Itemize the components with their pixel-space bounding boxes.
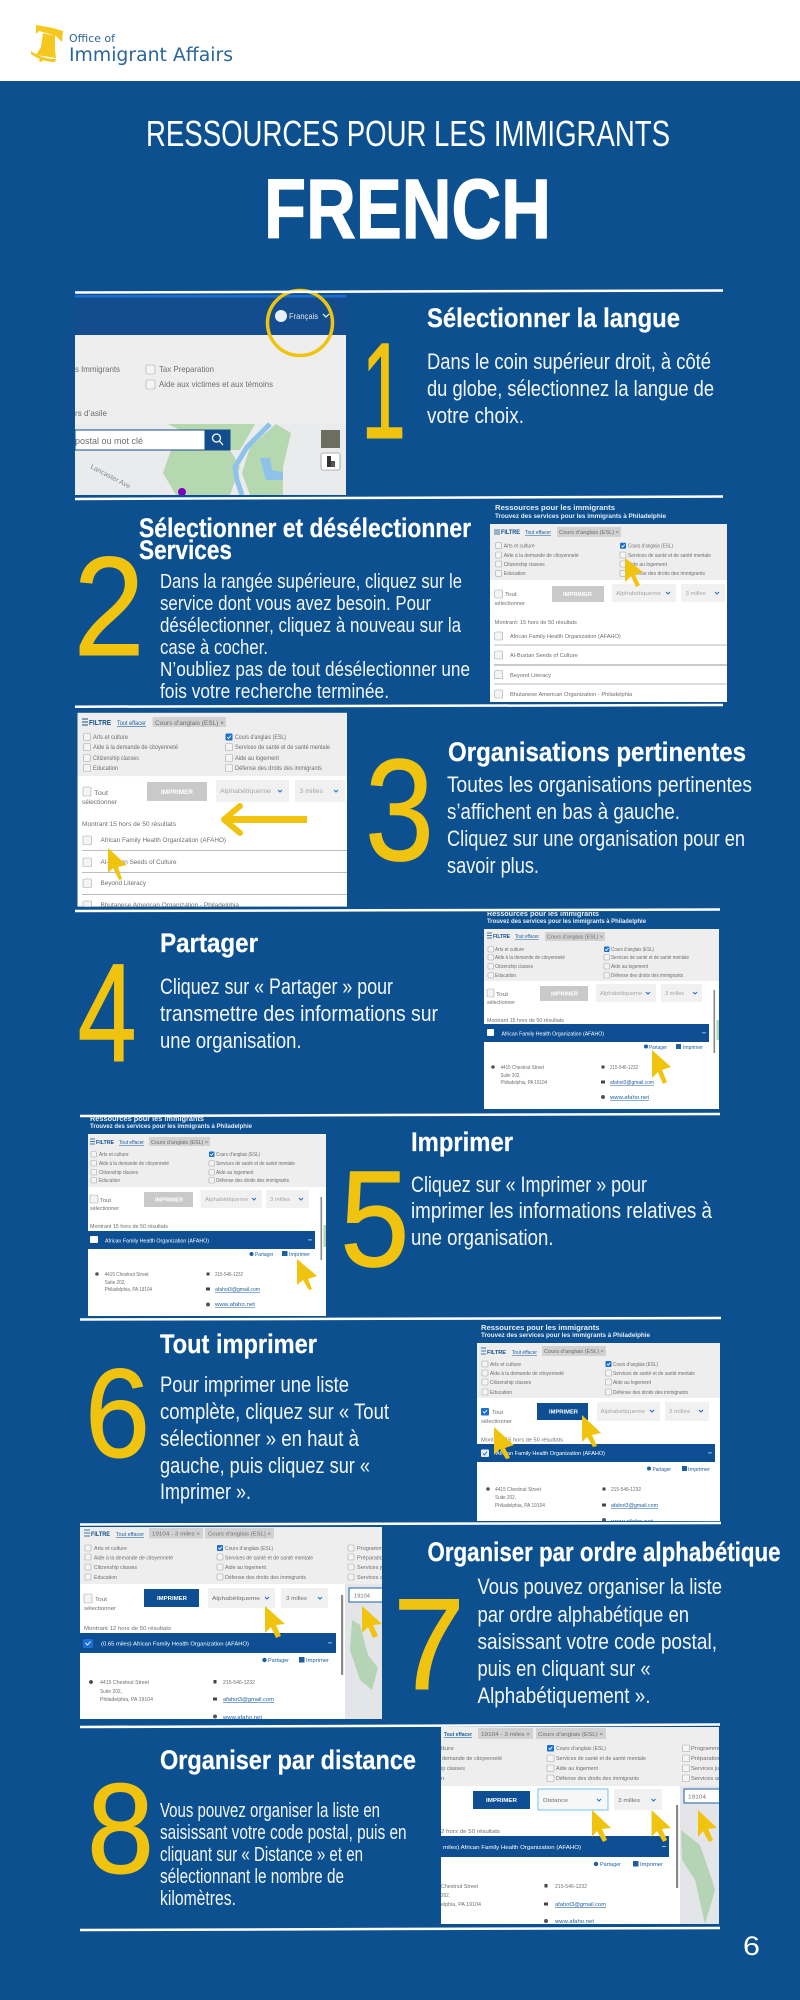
screenshot: service filters: Cours d’anglais (ESL) × bbox=[559, 530, 619, 536]
text block: fois votre recherche terminée. bbox=[160, 681, 389, 703]
screenshot: print link: Défense des droits des immigrants bbox=[216, 1178, 289, 1184]
text block: Pour imprimer une liste bbox=[160, 1372, 349, 1397]
screenshot: results list: Montrant 15 hors de 50 résultats bbox=[82, 822, 176, 828]
icon: liberty bell bbox=[31, 25, 63, 62]
screenshot: print link: Trouvez des services pour les immigrants à Philadelphie bbox=[90, 1124, 253, 1130]
screenshot: distance sort bbox=[441, 1727, 740, 1925]
screenshot: language selector: Français bbox=[289, 311, 318, 321]
heading bbox=[139, 513, 471, 565]
text block: Cliquez sur « Partager » pour bbox=[160, 974, 393, 999]
screenshot: alphabetical sort: Montrant 12 hors de 50 résultats bbox=[84, 1626, 171, 1632]
number 7: 7 bbox=[393, 1571, 465, 1717]
screenshot: alphabetical sort: Imprimer bbox=[306, 1658, 329, 1664]
text block: sélectionnant le nombre de bbox=[160, 1866, 344, 1888]
screenshot: alphabetical sort: Aide au logement bbox=[225, 1565, 266, 1571]
screenshot: print link: afahot3@gmail.com bbox=[215, 1287, 260, 1293]
screenshot: distance sort: Services aux bbox=[691, 1776, 724, 1782]
screenshot: alphabetical sort: Cours d’anglais (ESL) bbox=[225, 1546, 273, 1552]
header band bbox=[0, 0, 800, 81]
screenshot: language selector: Aide aux victimes et aux témoins bbox=[159, 379, 273, 389]
screenshot: print link: Ressources pour les immigrants bbox=[90, 1114, 204, 1123]
text block: Imprimer ». bbox=[160, 1479, 251, 1504]
icon: yellow cursor bbox=[297, 1259, 317, 1290]
text block: Toutes les organisations pertinentes bbox=[447, 772, 752, 797]
text block: cliquant sur « Distance » et en bbox=[160, 1844, 363, 1866]
text block: s’affichent en bas à gauche. bbox=[447, 799, 680, 824]
screenshot: select all and print: African Family Health Organization (AFAHO) bbox=[496, 1451, 605, 1457]
screenshot: service filters: Tout effacer bbox=[525, 530, 551, 536]
screenshot: alphabetical sort: Défense des droits des immigrants bbox=[225, 1575, 306, 1581]
screenshot: share link: sélectionner bbox=[487, 1000, 515, 1006]
heading: Imprimer bbox=[411, 1127, 513, 1157]
screenshot: service filters: Al-Bustan Seeds of Culture bbox=[510, 653, 578, 659]
arrow: points to results bbox=[224, 806, 307, 833]
screenshot: alphabetical sort: Services juridiques bbox=[357, 1565, 404, 1571]
screenshot: print link: Aide à la demande de citoyenneté bbox=[99, 1161, 169, 1167]
screenshot: select all and print: Imprimer bbox=[688, 1467, 710, 1473]
text block: service dont vous avez besoin. Pour bbox=[160, 593, 431, 615]
screenshot: service filters: Ressources pour les immigrants bbox=[495, 503, 615, 512]
screenshot: results list: sélectionner bbox=[82, 800, 117, 806]
icon: yellow cursor, print bbox=[582, 1415, 601, 1447]
screenshot: print link: FILTRE bbox=[96, 1140, 114, 1146]
text block: imprimer les informations relatives à bbox=[411, 1198, 713, 1223]
text block: kilomètres. bbox=[160, 1888, 236, 1910]
screenshot: service filters: IMPRIMER bbox=[563, 592, 592, 598]
screenshot: language selector: Tax Preparation bbox=[159, 364, 214, 374]
screenshot: results list: Cours d’anglais (ESL) bbox=[235, 735, 286, 741]
screenshot: share link: Arts et culture bbox=[495, 947, 524, 953]
screenshot: share link: Défense des droits des immigrants bbox=[611, 973, 683, 979]
panel: step 6 bbox=[85, 1323, 720, 1525]
screenshot: select all and print: Arts et culture bbox=[490, 1362, 521, 1368]
panel: step 8 bbox=[87, 1727, 740, 1925]
screenshot: distance sort: 202, bbox=[441, 1893, 450, 1899]
screenshot: share link: FILTRE bbox=[493, 934, 510, 940]
screenshot: service filters: Cours d’anglais (ESL) bbox=[628, 544, 673, 550]
screenshot: distance sort: 215-546-1232 bbox=[555, 1884, 587, 1890]
screenshot: distance sort: Chestnut Street bbox=[441, 1884, 478, 1890]
screenshot: results list: Tout bbox=[94, 791, 108, 797]
screenshot: alphabetical sort: Arts et culture bbox=[94, 1546, 127, 1552]
screenshot: print link: Cours d’anglais (ESL) bbox=[216, 1152, 260, 1158]
screenshot: select all and print: Aide à la demande de citoyenneté bbox=[490, 1371, 564, 1377]
screenshot: alphabetical sort bbox=[80, 1527, 404, 1721]
screenshot: print link: Services de santé et de santé mentale bbox=[216, 1161, 295, 1167]
screenshot: distance sort: Programmes bbox=[691, 1746, 724, 1752]
screenshot: share link: Citizenship classes bbox=[495, 964, 533, 970]
panel: step 7 bbox=[80, 1527, 780, 1721]
screenshot: share link: Services de santé et de santé mentale bbox=[611, 955, 689, 961]
screenshot: print link: Philadelphia, PA 19104 bbox=[105, 1287, 152, 1293]
text block bbox=[160, 974, 438, 1053]
screenshot: select all and print: 4415 Chestnut Street bbox=[495, 1487, 542, 1493]
screenshot: select all and print: Education bbox=[490, 1390, 512, 1396]
screenshot: results list: Services de santé et de santé mentale bbox=[235, 745, 331, 751]
screenshot: alphabetical sort: sélectionner bbox=[84, 1606, 116, 1612]
screenshot: distance sort: Cours d’anglais (ESL) × bbox=[538, 1732, 603, 1738]
page number: 6 bbox=[743, 1931, 760, 1961]
screenshot: print link: Education bbox=[99, 1178, 120, 1184]
text block bbox=[478, 1574, 722, 1708]
screenshot: distance sort: Partager bbox=[600, 1862, 621, 1868]
icon: yellow cursor, select all bbox=[494, 1427, 514, 1459]
screenshot: results list: Aide à la demande de citoyenneté bbox=[93, 745, 179, 751]
number 3: 3 bbox=[365, 729, 434, 891]
screenshot: share link: Ressources pour les immigrants bbox=[487, 909, 599, 918]
panel: step 4 bbox=[78, 909, 719, 1109]
icon: yellow cursor, miles menu bbox=[652, 1810, 671, 1842]
title bbox=[146, 113, 670, 256]
screenshot: distance sort: afahot3@gmail.com bbox=[555, 1902, 606, 1908]
screenshot: select all and print: afahot3@gmail.com bbox=[611, 1503, 658, 1509]
language heading: FRENCH bbox=[264, 162, 551, 256]
screenshot: distance sort: Tout effacer bbox=[444, 1732, 473, 1738]
screenshot: language selector: s Immigrants bbox=[75, 364, 120, 374]
heading: Sélectionner la langue bbox=[427, 303, 680, 333]
text block: une organisation. bbox=[411, 1225, 554, 1250]
screenshot: alphabetical sort: Aide à la demande de citoyenneté bbox=[94, 1556, 173, 1562]
text block: Vous pouvez organiser la liste en bbox=[160, 1800, 380, 1822]
screenshot: print link: Cours d’anglais (ESL) × bbox=[151, 1140, 208, 1146]
panel: step 3 bbox=[78, 713, 752, 910]
screenshot: service filters: Beyond Literacy bbox=[510, 673, 551, 679]
text block: Cliquez sur une organisation pour en bbox=[447, 826, 745, 851]
screenshot: results list: Education bbox=[93, 766, 118, 772]
screenshot: select all and print: Tout effacer bbox=[512, 1350, 537, 1356]
icon: yellow cursor bbox=[652, 1050, 671, 1084]
number 1: 1 bbox=[361, 315, 406, 468]
screenshot: distance sort: 19104 bbox=[688, 1794, 707, 1800]
screenshot: share link: Tout effacer bbox=[515, 934, 539, 940]
text block: par ordre alphabétique en bbox=[478, 1602, 689, 1627]
screenshot: share link: Partager bbox=[649, 1045, 667, 1051]
screenshot: results list: Tout effacer bbox=[117, 721, 146, 727]
screenshot: alphabetical sort: FILTRE bbox=[91, 1532, 110, 1538]
logo wordmark: Office of bbox=[69, 32, 116, 45]
screenshot: print link: 215-546-1232 bbox=[215, 1272, 243, 1278]
screenshot: share link: Cours d’anglais (ESL) × bbox=[547, 934, 603, 940]
screenshot: results list: 3 milles bbox=[300, 789, 323, 795]
screenshot: print link: www.afaho.net bbox=[215, 1302, 256, 1308]
screenshot: select all and print: Services de santé et de santé mentale bbox=[613, 1371, 695, 1377]
text block bbox=[427, 349, 714, 428]
screenshot: results list bbox=[78, 713, 347, 910]
screenshot: select all and print: Alphabétiqueme bbox=[600, 1409, 645, 1415]
screenshot: service filters: Montrant: 15 hors de 50 résultats bbox=[495, 620, 577, 626]
screenshot: share link: Alphabétiqueme bbox=[600, 991, 642, 997]
screenshot: print link bbox=[88, 1114, 326, 1316]
screenshot: select all and print bbox=[477, 1323, 720, 1525]
screenshot: service filters: Aide à la demande de citoyenneté bbox=[504, 553, 579, 559]
screenshot: alphabetical sort: Services de santé et de santé mentale bbox=[225, 1556, 313, 1562]
screenshot: share link: Imprimer bbox=[683, 1045, 703, 1051]
text block: complète, cliquez sur « Tout bbox=[160, 1399, 389, 1424]
screenshot: distance sort: 19104 - 3 miles × bbox=[481, 1732, 530, 1738]
text block bbox=[160, 571, 470, 703]
screenshot: results list: Citizenship classes bbox=[93, 756, 139, 762]
text block: saisissant votre code postal, bbox=[478, 1629, 717, 1654]
screenshot: service filters: Education bbox=[504, 571, 526, 577]
text block bbox=[411, 1172, 713, 1250]
screenshot: alphabetical sort: IMPRIMER bbox=[157, 1596, 187, 1602]
screenshot: alphabetical sort: Tout effacer bbox=[116, 1532, 144, 1538]
screenshot: print link: Alphabétiqueme bbox=[205, 1197, 248, 1203]
screenshot: share link: Suite 202, bbox=[500, 1073, 520, 1079]
screenshot: distance sort: demande de citoyenneté bbox=[442, 1756, 502, 1762]
screenshot: share link: IMPRIMER bbox=[551, 992, 578, 998]
screenshot: alphabetical sort: Suite 202, bbox=[100, 1689, 122, 1695]
screenshot: distance sort: Distance bbox=[543, 1798, 568, 1804]
screenshot: select all and print: FILTRE bbox=[487, 1350, 506, 1356]
screenshot: distance sort: www.afaho.net bbox=[554, 1919, 594, 1925]
screenshot: select all and print: Défense des droits des immigrants bbox=[613, 1390, 688, 1396]
screenshot: select all and print: Tout bbox=[492, 1410, 504, 1416]
screenshot: print link: IMPRIMER bbox=[155, 1198, 183, 1204]
text block bbox=[447, 772, 752, 878]
screenshot: results list: Beyond Literacy bbox=[100, 881, 146, 887]
screenshot: service filters: Trouvez des services pour les immigrants à Philadelphie bbox=[495, 513, 667, 520]
screenshot: select all and print: www.afaho.net bbox=[611, 1519, 654, 1525]
text block: Cliquez sur « Imprimer » pour bbox=[411, 1172, 647, 1197]
screenshot: print link: Tout effacer bbox=[119, 1140, 144, 1146]
screenshot: service filters bbox=[490, 503, 727, 702]
screenshot: print link: Montrant 15 hors de 50 résultats bbox=[90, 1224, 169, 1230]
screenshot: alphabetical sort: Programmes bbox=[357, 1546, 389, 1552]
screenshot: distance sort: lture bbox=[441, 1746, 454, 1752]
screenshot: service filters: Bhutanese American Organization - Philadelphia bbox=[510, 692, 632, 698]
screenshot: results list: FILTRE bbox=[89, 720, 111, 727]
screenshot: service filters: Arts et culture bbox=[504, 544, 535, 550]
screenshot: select all and print: Ressources pour les immigrants bbox=[481, 1323, 600, 1332]
screenshot: distance sort: elphia, PA 19104 bbox=[441, 1902, 482, 1908]
screenshot: results list: IMPRIMER bbox=[161, 790, 194, 796]
logo wordmark bbox=[69, 32, 233, 66]
text block: gauche, puis cliquez sur « bbox=[160, 1453, 370, 1478]
screenshot: print link: Citizenship classes bbox=[99, 1170, 138, 1176]
screenshot: share link bbox=[484, 909, 719, 1109]
number 5: 5 bbox=[340, 1143, 410, 1296]
text block: Dans la rangée supérieure, cliquez sur le bbox=[160, 571, 462, 593]
screenshot: service filters: Alphabétiqueme bbox=[616, 591, 661, 597]
text block: une organisation. bbox=[160, 1028, 302, 1053]
screenshot: language selector: postal ou mot clé bbox=[75, 436, 143, 447]
number 6: 6 bbox=[85, 1343, 150, 1484]
screenshot: alphabetical sort: 19104 bbox=[354, 1594, 370, 1600]
screenshot: alphabetical sort: 215-546-1232 bbox=[223, 1680, 255, 1686]
screenshot: print link: Partager bbox=[255, 1252, 274, 1258]
screenshot: distance sort: 2 hors de 50 résultats bbox=[441, 1829, 500, 1835]
screenshot: results list: Alphabétiqueme bbox=[220, 789, 272, 795]
screenshot: select all and print: Aide au logement bbox=[613, 1380, 652, 1386]
heading: Sélectionner et désélectionner bbox=[139, 513, 471, 543]
screenshot: select all and print: Cours d’anglais (ESL) × bbox=[544, 1349, 604, 1355]
screenshot: alphabetical sort: Tout bbox=[95, 1597, 107, 1603]
heading: Services bbox=[139, 535, 232, 565]
screenshot: share link: 3 milles bbox=[665, 991, 685, 997]
screenshot: select all and print: Philadelphia, PA 19104 bbox=[495, 1503, 545, 1509]
screenshot: distance sort: miles) African Family Health Organization (AFAHO) bbox=[443, 1845, 581, 1851]
screenshot: distance sort: Services de santé et de santé mentale bbox=[556, 1756, 646, 1762]
screenshot: share link: Philadelphia, PA 19104 bbox=[500, 1080, 547, 1086]
heading: Organiser par distance bbox=[160, 1745, 416, 1775]
screenshot: alphabetical sort: (0.65 miles) African Family Health Organization (AFAHO) bbox=[101, 1642, 249, 1648]
number 8: 8 bbox=[87, 1758, 154, 1901]
screenshot: share link: Aide à la demande de citoyenneté bbox=[495, 955, 565, 961]
screenshot: distance sort: 3 milles bbox=[618, 1798, 640, 1804]
icon: yellow cursor, sort menu bbox=[265, 1606, 285, 1638]
panel: step 2 bbox=[74, 503, 727, 703]
screenshot: distance sort: Cours d’anglais (ESL) bbox=[556, 1746, 606, 1752]
text block bbox=[160, 1372, 389, 1504]
screenshot: service filters: Aide au logement bbox=[628, 562, 668, 568]
text block bbox=[160, 1800, 407, 1910]
text block: votre choix. bbox=[427, 403, 524, 428]
screenshot: language selector: Lancaster Ave bbox=[89, 464, 131, 491]
screenshot: share link: Tout bbox=[496, 992, 509, 998]
text block: N’oubliez pas de tout désélectionner une bbox=[160, 659, 470, 681]
screenshot: print link: Tout bbox=[100, 1198, 112, 1204]
logo: Office of Immigrant Affairs bbox=[31, 25, 233, 66]
screenshot: results list: Aide au logement bbox=[235, 756, 279, 762]
screenshot: print link: Imprimer bbox=[289, 1252, 310, 1258]
screenshot: select all and print: Cours d’anglais (ESL) bbox=[613, 1362, 658, 1368]
text block: savoir plus. bbox=[447, 853, 539, 878]
screenshot: distance sort: n bbox=[441, 1776, 444, 1782]
screenshot: share link: African Family Health Organization (AFAHO) bbox=[502, 1032, 604, 1038]
screenshot: share link: afahot3@gmail.com bbox=[610, 1080, 654, 1086]
heading: Partager bbox=[160, 928, 258, 958]
screenshot: alphabetical sort: Cours d’anglais (ESL) × bbox=[208, 1532, 271, 1538]
screenshot: service filters: 3 milles bbox=[686, 591, 706, 597]
screenshot: distance sort: ip classes bbox=[441, 1766, 465, 1772]
heading: Organisations pertinentes bbox=[448, 737, 746, 767]
screenshot: select all and print: Montrant 15 hors de 50 résultats bbox=[481, 1438, 563, 1444]
text block: Vous pouvez organiser la liste bbox=[478, 1574, 722, 1599]
screenshot: service filters: Citizenship classes bbox=[504, 562, 545, 568]
icon: yellow cursor bbox=[625, 558, 643, 587]
screenshot: print link: 4415 Chestnut Street bbox=[105, 1272, 149, 1278]
screenshot: results list: Al-Bustan Seeds of Culture bbox=[100, 860, 177, 866]
screenshot: service filters: FILTRE bbox=[501, 530, 520, 536]
screenshot: select all and print: Trouvez des services pour les immigrants à Philadelphie bbox=[481, 1333, 651, 1339]
screenshot: share link: 4415 Chestnut Street bbox=[500, 1065, 545, 1071]
text block: Alphabétiquement ». bbox=[478, 1683, 650, 1708]
screenshot: share link: Aide au logement bbox=[611, 964, 649, 970]
screenshot: distance sort: Aide au logement bbox=[556, 1766, 598, 1772]
screenshot: alphabetical sort: Philadelphia, PA 19104 bbox=[100, 1697, 153, 1703]
text block: transmettre des informations sur bbox=[160, 1001, 438, 1026]
screenshot: results list: Cours d’anglais (ESL) × bbox=[155, 721, 225, 727]
screenshot: print link: sélectionner bbox=[90, 1206, 119, 1212]
icon: yellow cursor, postal code bbox=[698, 1810, 717, 1842]
screenshot: print link: Aide au logement bbox=[216, 1170, 254, 1176]
screenshot: print link: African Family Health Organization (AFAHO) bbox=[105, 1238, 209, 1244]
screenshot: service filters: Services de santé et de santé mentale bbox=[628, 553, 711, 559]
screenshot: print link: Suite 202, bbox=[105, 1280, 126, 1286]
icon: yellow cursor bbox=[108, 848, 126, 880]
screenshot: print link: Arts et culture bbox=[99, 1152, 129, 1158]
screenshot: distance sort: Services juridiques bbox=[691, 1766, 740, 1772]
screenshot: results list: African Family Health Organization (AFAHO) bbox=[100, 838, 226, 844]
screenshot: results list: Bhutanese American Organization - Philadelphia bbox=[100, 903, 240, 909]
screenshot: alphabetical sort: Préparation bbox=[357, 1556, 386, 1562]
screenshot: alphabetical sort: Education bbox=[94, 1575, 117, 1581]
screenshot: language selector bbox=[75, 295, 346, 496]
number 2: 2 bbox=[74, 527, 145, 685]
screenshot: select all and print: 215-546-1232 bbox=[611, 1487, 641, 1493]
text block: saisissant votre code postal, puis en bbox=[160, 1822, 407, 1844]
screenshot: select all and print: IMPRIMER bbox=[549, 1410, 578, 1416]
screenshot: share link: Education bbox=[495, 973, 516, 979]
text block: puis en cliquant sur « bbox=[478, 1656, 650, 1681]
screenshot: share link: Montrant 15 hors de 50 résultats bbox=[487, 1018, 565, 1024]
screenshot: distance sort: Imprimer bbox=[640, 1862, 663, 1868]
screenshot: select all and print: Citizenship classes bbox=[490, 1380, 531, 1386]
screenshot: alphabetical sort: Partager bbox=[268, 1658, 289, 1664]
screenshot: distance sort: Préparation bbox=[691, 1756, 721, 1762]
screenshot: share link: www.afaho.net bbox=[610, 1095, 650, 1101]
screenshot: alphabetical sort: afahot3@gmail.com bbox=[223, 1697, 274, 1703]
callout: yellow circle around language menu bbox=[268, 290, 332, 356]
screenshot: alphabetical sort: 3 milles bbox=[286, 1596, 307, 1602]
screenshot: select all and print: 3 milles bbox=[669, 1409, 690, 1415]
text block: sélectionner » en haut à bbox=[160, 1426, 360, 1451]
screenshot: service filters: sélectionner bbox=[495, 601, 525, 607]
screenshot: share link: Trouvez des services pour les immigrants à Philadelphie bbox=[487, 919, 647, 925]
panel: step 5 bbox=[88, 1114, 713, 1316]
screenshot: service filters: African Family Health Organization (AFAHO) bbox=[510, 634, 621, 640]
logo wordmark: Immigrant Affairs bbox=[69, 45, 233, 66]
screenshot: distance sort: IMPRIMER bbox=[486, 1798, 518, 1804]
screenshot: service filters: Défense des droits des immigrants bbox=[628, 571, 705, 577]
icon: yellow cursor, distance menu bbox=[592, 1810, 611, 1842]
icon: yellow cursor, postal code bbox=[362, 1606, 382, 1638]
screenshot: alphabetical sort: www.afaho.net bbox=[222, 1715, 262, 1721]
text block: case à cocher. bbox=[160, 637, 268, 659]
number 4: 4 bbox=[78, 934, 137, 1091]
heading: Tout imprimer bbox=[160, 1329, 317, 1359]
screenshot: share link: 215-546-1232 bbox=[610, 1065, 638, 1071]
screenshot: results list: Défense des droits des immigrants bbox=[235, 766, 322, 772]
text block: du globe, sélectionnez la langue de bbox=[427, 376, 714, 401]
panel: step 1 bbox=[75, 290, 714, 496]
screenshot: select all and print: Suite 202, bbox=[495, 1495, 516, 1501]
screenshot: print link: 3 milles bbox=[270, 1197, 291, 1203]
screenshot: select all and print: sélectionner bbox=[481, 1419, 512, 1425]
screenshot: language selector: rs d’asile bbox=[75, 408, 107, 418]
screenshot: distance sort: Défense des droits des immigrants bbox=[556, 1776, 639, 1782]
screenshot: alphabetical sort: Alphabétiqueme bbox=[212, 1596, 260, 1602]
text block: désélectionner, cliquez à nouveau sur la bbox=[160, 615, 462, 637]
screenshot: alphabetical sort: 4415 Chestnut Street bbox=[100, 1680, 149, 1686]
screenshot: select all and print: Partager bbox=[652, 1467, 671, 1473]
screenshot: alphabetical sort: 19104 - 3 miles × bbox=[152, 1532, 200, 1538]
screenshot: alphabetical sort: Citizenship classes bbox=[94, 1565, 137, 1571]
screenshot: share link: Cours d’anglais (ESL) bbox=[611, 947, 654, 953]
text block: Dans le coin supérieur droit, à côté bbox=[427, 349, 711, 374]
screenshot: service filters: Tout bbox=[505, 592, 517, 598]
screenshot: alphabetical sort: Services aux bbox=[357, 1575, 389, 1581]
screenshot: results list: Arts et culture bbox=[93, 735, 129, 741]
